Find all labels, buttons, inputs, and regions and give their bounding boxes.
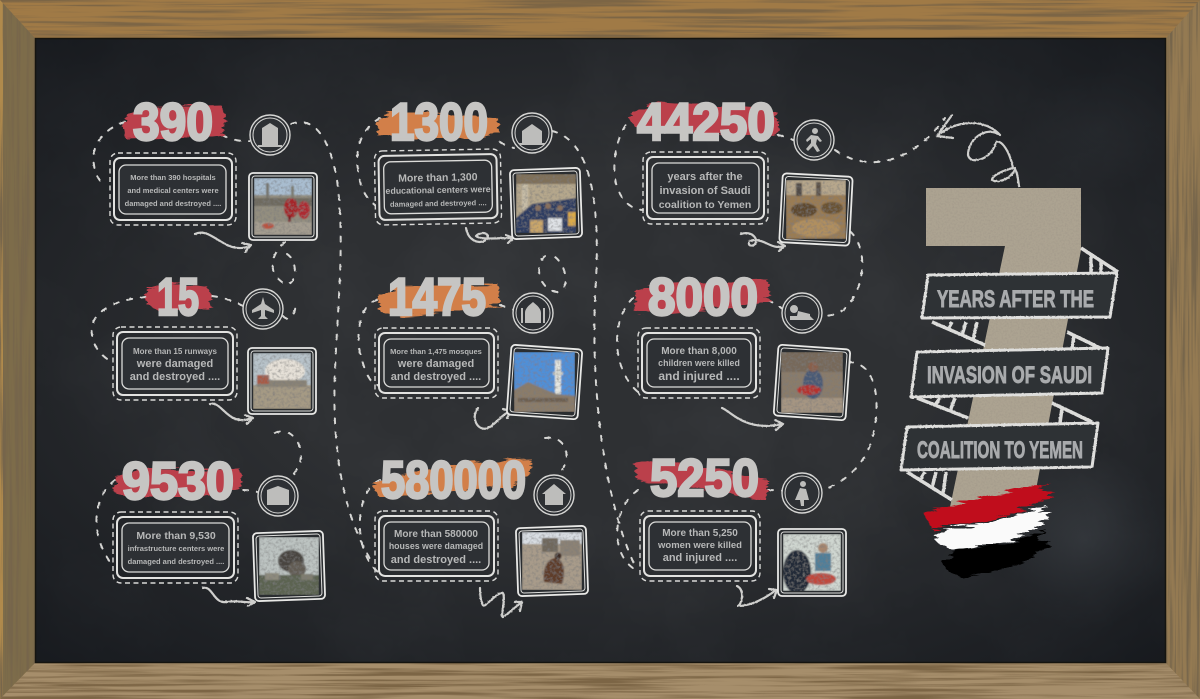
text box: More than 15 runways xyxy=(133,347,218,356)
text box: More than 9,530 xyxy=(136,530,216,542)
text box: More than 1,300 xyxy=(398,171,478,185)
text box: were damaged xyxy=(136,358,213,370)
brush stroke xyxy=(378,284,500,316)
panel: 1300 educational centers xyxy=(374,93,582,243)
icon: injured child xyxy=(782,293,822,333)
number: 9530 xyxy=(122,452,234,511)
panel: 44250 years after invasion xyxy=(630,93,853,251)
curly arrow xyxy=(937,115,1019,186)
icon: plane on runway xyxy=(243,289,283,329)
brush stroke xyxy=(634,280,770,314)
text box: and medical centers were xyxy=(127,186,219,195)
photo: destroyed mosque xyxy=(507,345,582,419)
panel: 8000 children xyxy=(634,268,850,430)
ribbon ladder folds xyxy=(907,248,1118,500)
text box: houses were damaged xyxy=(389,541,483,551)
dashed connector paths xyxy=(92,115,945,572)
number: 5250 xyxy=(650,449,759,508)
number: 580000 xyxy=(381,451,526,510)
arrow xyxy=(741,233,785,251)
icon: running person xyxy=(794,120,834,160)
icon: hospital xyxy=(250,115,290,155)
text box: More than 1,475 mosques xyxy=(390,347,482,356)
ribbon: years after the xyxy=(922,273,1117,318)
arrow xyxy=(210,404,253,424)
text box xyxy=(640,511,760,581)
text box xyxy=(643,152,768,224)
text box xyxy=(374,149,502,225)
arrow xyxy=(737,586,777,606)
text box: and destroyed .... xyxy=(391,554,481,566)
text box: and destroyed .... xyxy=(391,371,481,383)
icon: house xyxy=(534,475,574,515)
panel: 580000 houses xyxy=(373,451,588,617)
number: 15 xyxy=(157,268,199,327)
text box: More than 8,000 xyxy=(661,346,737,357)
panel: 5250 women xyxy=(635,449,846,606)
brush stroke xyxy=(630,102,778,136)
text box: women were killed xyxy=(657,540,742,551)
arrow xyxy=(203,588,255,606)
text box: More than 5,250 xyxy=(662,528,738,539)
arrow xyxy=(195,233,251,252)
ribbon banner xyxy=(901,248,1118,500)
ribbon: coalition to yemen: COALITION TO YEMEN xyxy=(917,437,1083,464)
brush stroke xyxy=(124,106,226,139)
text box: damaged and destroyed .... xyxy=(390,198,487,209)
number: 44250 xyxy=(637,93,775,152)
text box: invasion of Saudi xyxy=(659,185,751,197)
text box: and injured .... xyxy=(658,369,740,383)
arrow xyxy=(466,228,513,243)
text box: children were killed xyxy=(658,358,740,368)
brush stroke xyxy=(635,458,768,500)
text box: and injured .... xyxy=(663,552,737,564)
text box: damaged and destroyed .... xyxy=(125,199,221,208)
text box xyxy=(113,327,237,400)
number: 8000 xyxy=(648,268,758,327)
brush stroke xyxy=(376,112,499,138)
photo: woman with child xyxy=(778,529,846,596)
arrow xyxy=(722,408,783,430)
large number 7 xyxy=(926,188,1081,507)
panel: 15 runways xyxy=(113,268,316,424)
text box: infrastructure centers were xyxy=(128,544,224,553)
ribbon: coalition to yemen xyxy=(901,423,1098,470)
photo: man carrying child xyxy=(774,345,850,420)
text box: More than 580000 xyxy=(394,529,478,540)
text box xyxy=(638,328,760,398)
text box: were damaged xyxy=(397,358,474,370)
number: 1475 xyxy=(388,268,486,327)
panel: 390 hospitals xyxy=(110,93,317,252)
ribbon: invasion of saudi: INVASION OF SAUDI xyxy=(927,362,1092,389)
photo: rubble and rescue workers xyxy=(249,173,317,240)
icon: running woman xyxy=(782,473,822,513)
brush stroke xyxy=(373,460,533,496)
panel: 1475 mosques xyxy=(375,268,582,429)
brush stroke xyxy=(113,468,243,498)
text box xyxy=(375,328,498,398)
text box xyxy=(375,511,498,581)
text box: and destroyed .... xyxy=(130,371,220,383)
text box: years after the xyxy=(667,171,743,183)
icon: mosque xyxy=(513,293,553,333)
brush stroke xyxy=(146,282,212,312)
text box: More than 390 hospitals xyxy=(130,173,216,182)
arrow xyxy=(475,408,511,429)
photo: crowd in damaged school xyxy=(510,168,582,239)
photo: graves xyxy=(779,173,853,246)
text box xyxy=(110,153,236,225)
number: 390 xyxy=(133,93,213,152)
photo: smoke over city xyxy=(253,531,325,601)
panel: 9530 infrastructure xyxy=(113,452,325,606)
text box: damaged and destroyed .... xyxy=(128,557,224,566)
text box: coalition to Yemen xyxy=(659,199,751,211)
icon: infrastructure building xyxy=(258,476,298,516)
photo: airport xyxy=(248,348,316,414)
text box xyxy=(113,512,238,583)
photo: man in rubble xyxy=(516,526,588,596)
icon: school xyxy=(512,113,552,153)
text box: educational centers were xyxy=(385,184,491,196)
Yemen flag brush xyxy=(923,482,1055,578)
ribbon: years after the: YEARS AFTER THE xyxy=(937,286,1094,313)
number: 1300 xyxy=(390,93,488,152)
ribbon: invasion of saudi xyxy=(911,348,1108,397)
arrow xyxy=(480,588,522,617)
